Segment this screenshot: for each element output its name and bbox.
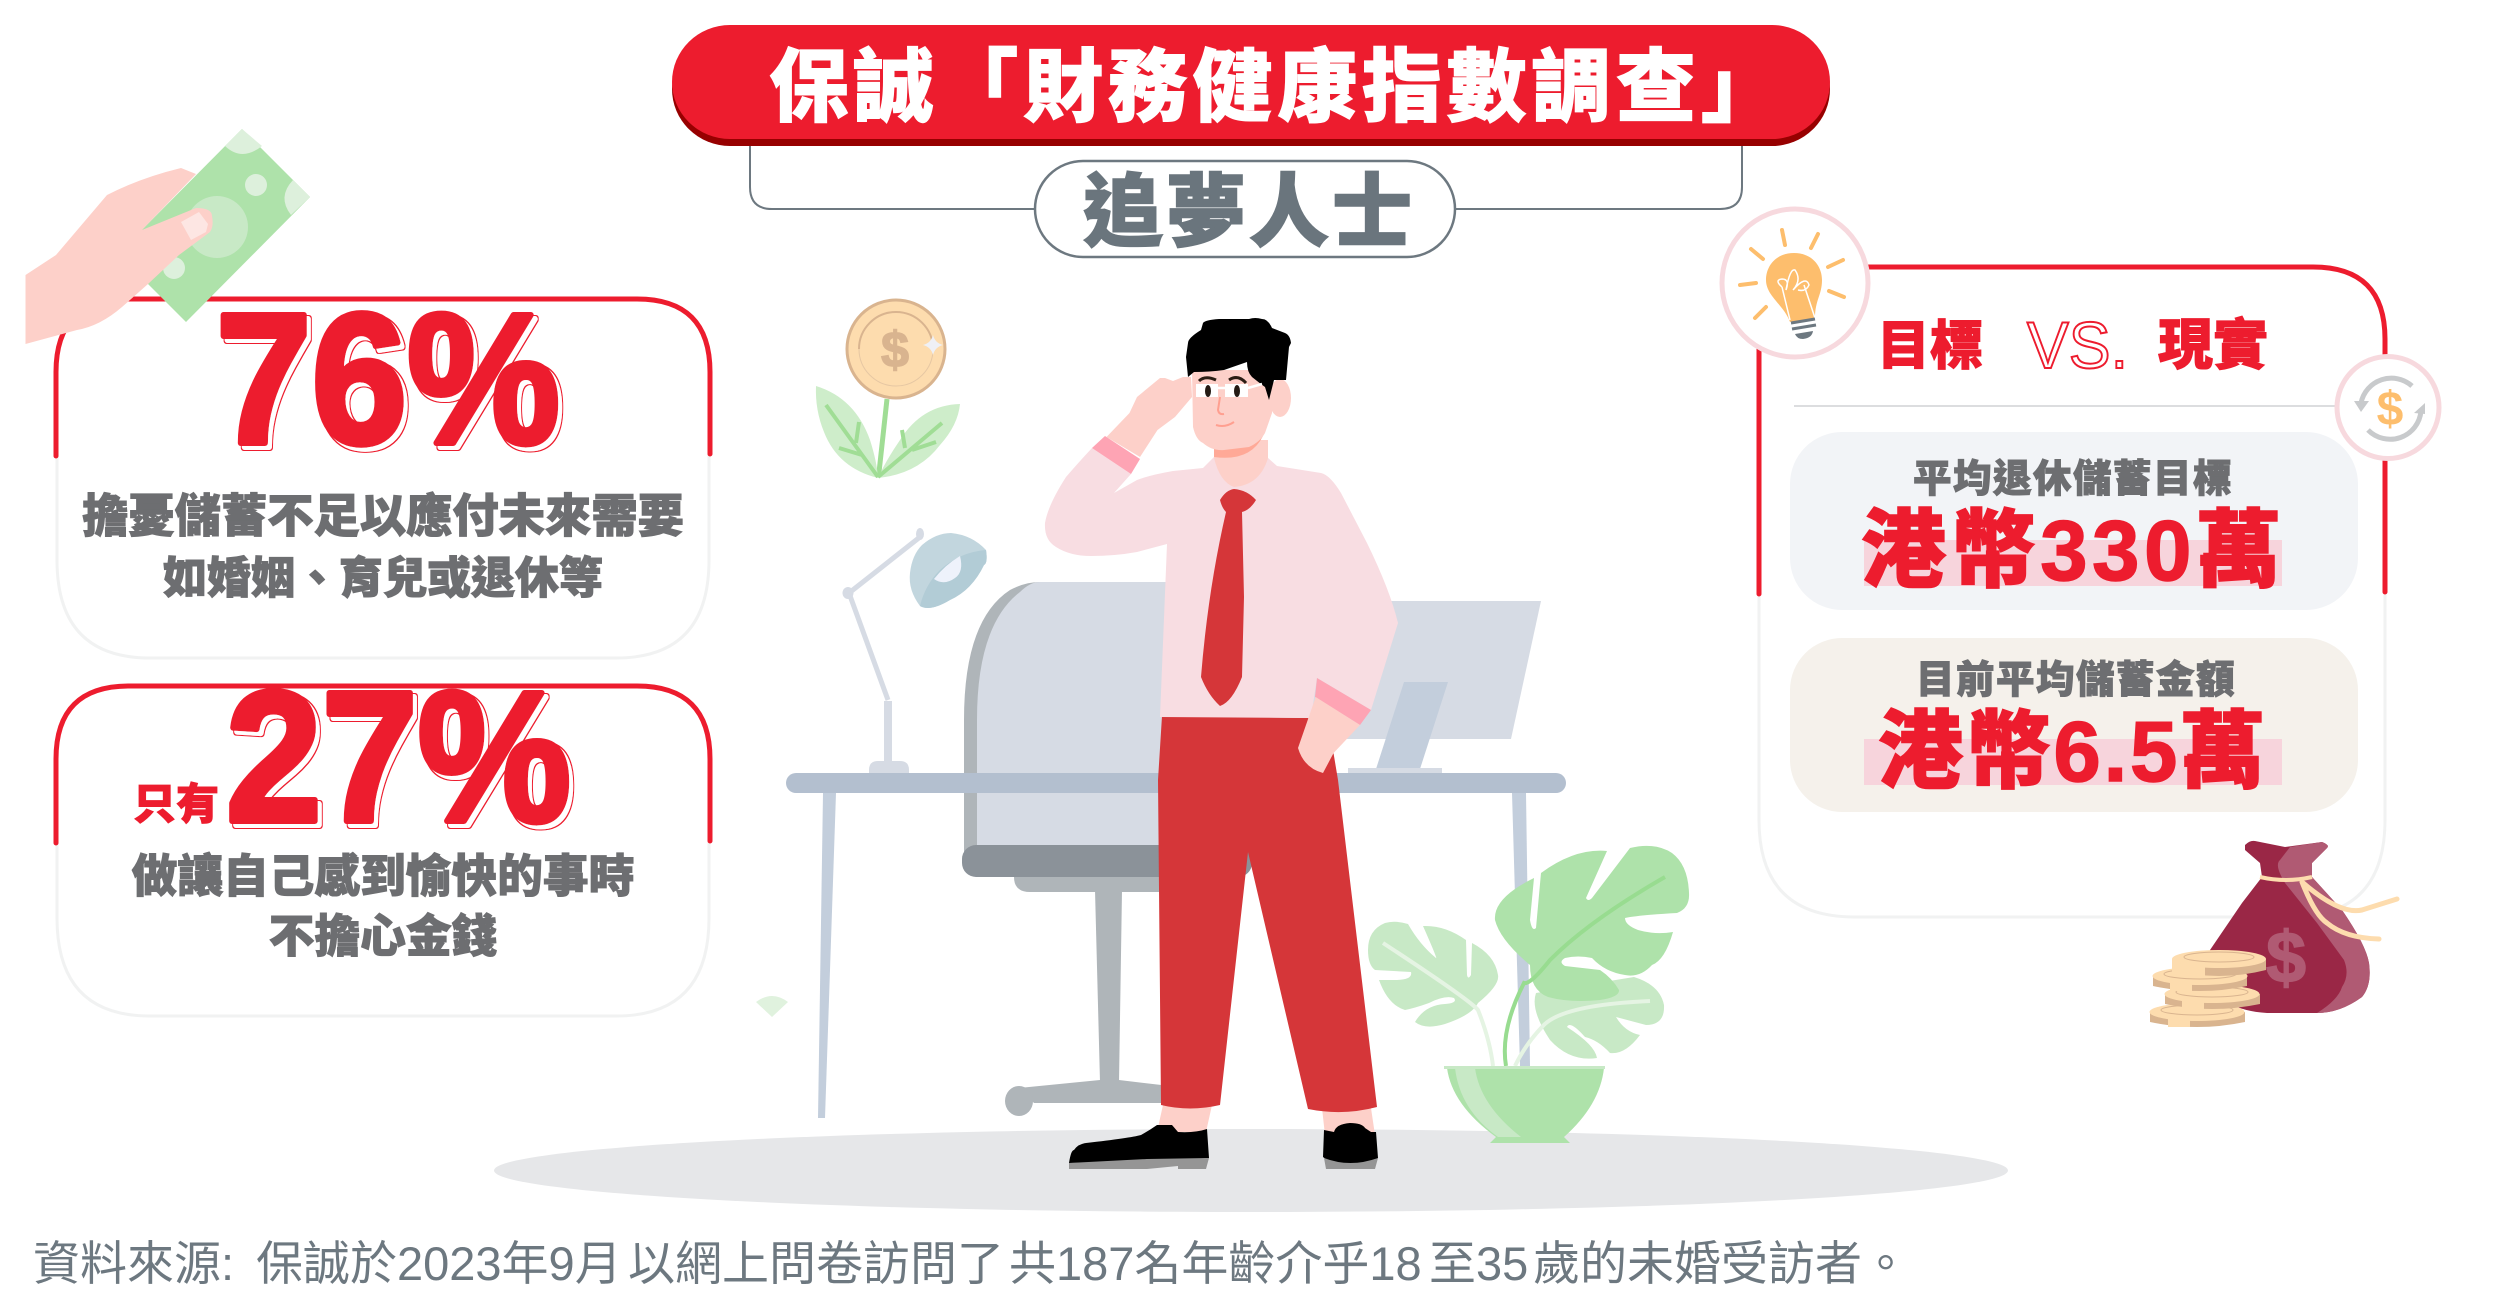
source note: 至35 [1429, 1237, 1528, 1290]
subtitle text: 追夢人士 [1083, 168, 1415, 257]
icon: dollar exchange [2337, 356, 2439, 458]
illustration: desk lamp [842, 528, 987, 773]
necktie [1201, 489, 1256, 706]
cuffs [1092, 436, 1140, 474]
source note: 以網上問卷訪問了 [628, 1237, 1004, 1290]
title text: 保誠「財務健康指數調查」 [769, 43, 1785, 132]
shirt [1045, 448, 1398, 718]
source note: 歲的未婚受訪者。 [1533, 1237, 1909, 1290]
panel: goal vs reality [1759, 267, 2385, 917]
only label: 只有 [133, 781, 219, 829]
icon: small leaf [756, 996, 788, 1017]
illustration: man with glasses [1045, 318, 1398, 1169]
ground shadow [494, 1129, 2008, 1212]
27% description: 做讓自己感到愉快的事時 [132, 851, 634, 902]
coin dollar sign: $ [881, 322, 909, 378]
illustration: computer monitor [1300, 601, 1541, 774]
source note: 共187名年齡介乎18 [1009, 1237, 1422, 1290]
card: retirement savings goal: 平均退休儲蓄目標 [1913, 458, 2233, 501]
subtitle frame and pill [750, 140, 1742, 257]
card: retirement savings goal: 港幣330萬 [1861, 504, 2281, 599]
icon: light bulb [1722, 209, 1868, 357]
illustration: potted plant [1368, 846, 1689, 1143]
bag dollar sign: $ [2266, 918, 2306, 998]
card: current average savings: 目前平均儲蓄金額 [1916, 659, 2236, 702]
panel heading: VS. [2027, 308, 2128, 382]
illustration: money bag and coins [2150, 841, 2397, 1027]
shoes [1069, 1123, 1378, 1169]
hair [1186, 318, 1291, 400]
76% description: 擔憂儲蓄不足以應付未來需要 [82, 490, 684, 542]
source note: 資料來源: [33, 1237, 234, 1290]
illustration: desk [786, 773, 1566, 1118]
76% description [82, 490, 684, 603]
coin stack [2150, 950, 2266, 1027]
icon: hand holding banknote [26, 129, 310, 344]
ankles [1157, 1105, 1375, 1135]
card: retirement savings goal [1790, 432, 2358, 610]
raised hand [1106, 377, 1192, 457]
hand in pocket [1298, 697, 1360, 773]
panel heading [1877, 308, 2268, 382]
illustration: coin plant [816, 300, 960, 478]
panel: 27% statistic [56, 654, 710, 1016]
panel heading: 現實 [2158, 314, 2268, 376]
27% description: 不擔心金錢 [269, 911, 497, 962]
exchange dollar sign: $ [2377, 383, 2404, 436]
card: current average savings: 港幣6.5萬 [1878, 705, 2265, 800]
76% description: 如婚姻、育兒或退休等 [163, 554, 603, 603]
face [1192, 370, 1272, 450]
source note: 保誠於2023年9月 [256, 1237, 622, 1290]
neck [1214, 440, 1268, 487]
76% figure: 76% [216, 276, 560, 483]
panel: 76% statistic [56, 276, 710, 658]
title banner [672, 25, 1830, 146]
trousers [1158, 716, 1377, 1112]
glasses [1196, 384, 1262, 397]
panel heading: 目標 [1877, 317, 1983, 376]
27% description [132, 851, 634, 962]
illustration: office chair [962, 582, 1252, 1116]
27% figure: 27% [226, 654, 571, 861]
card: current average savings [1790, 638, 2358, 812]
